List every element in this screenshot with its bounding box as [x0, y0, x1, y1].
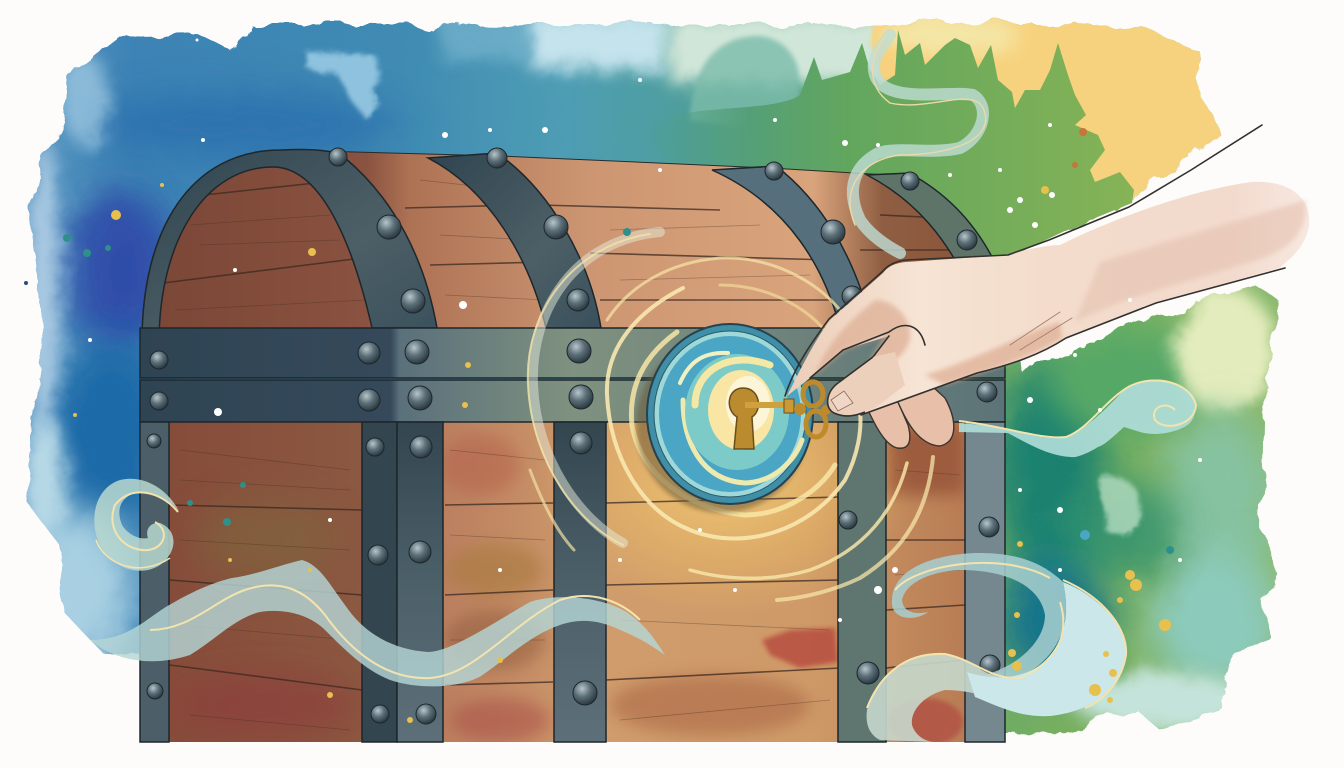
body colour washes — [170, 345, 966, 746]
plank lines — [163, 182, 965, 690]
hand and arm — [785, 125, 1309, 415]
top wisp — [850, 35, 986, 253]
arch straps — [142, 149, 995, 342]
hand back fingers — [868, 375, 954, 448]
thumb tip — [828, 352, 905, 416]
magical swirl rings — [528, 232, 933, 600]
body wood — [165, 420, 968, 742]
horizontal straps — [140, 328, 1005, 422]
pale wash patch — [305, 50, 382, 118]
hand outline — [785, 125, 1285, 415]
bottom left wisp — [90, 560, 665, 686]
rivets — [147, 148, 1000, 724]
keyhole — [729, 388, 758, 449]
keyhole plate — [636, 324, 813, 513]
wisps of magic — [90, 35, 1196, 742]
left curl wisp — [94, 479, 179, 571]
key — [745, 382, 831, 437]
lid wood — [142, 150, 1003, 345]
wood grain — [175, 180, 960, 730]
paint splatter — [24, 38, 1202, 723]
right wisp — [959, 379, 1196, 457]
chest — [140, 148, 1005, 746]
lower right swirls — [867, 553, 1126, 742]
teal mass at top — [690, 36, 800, 130]
forest silhouette — [640, 30, 1134, 262]
vertical straps — [140, 422, 1005, 742]
